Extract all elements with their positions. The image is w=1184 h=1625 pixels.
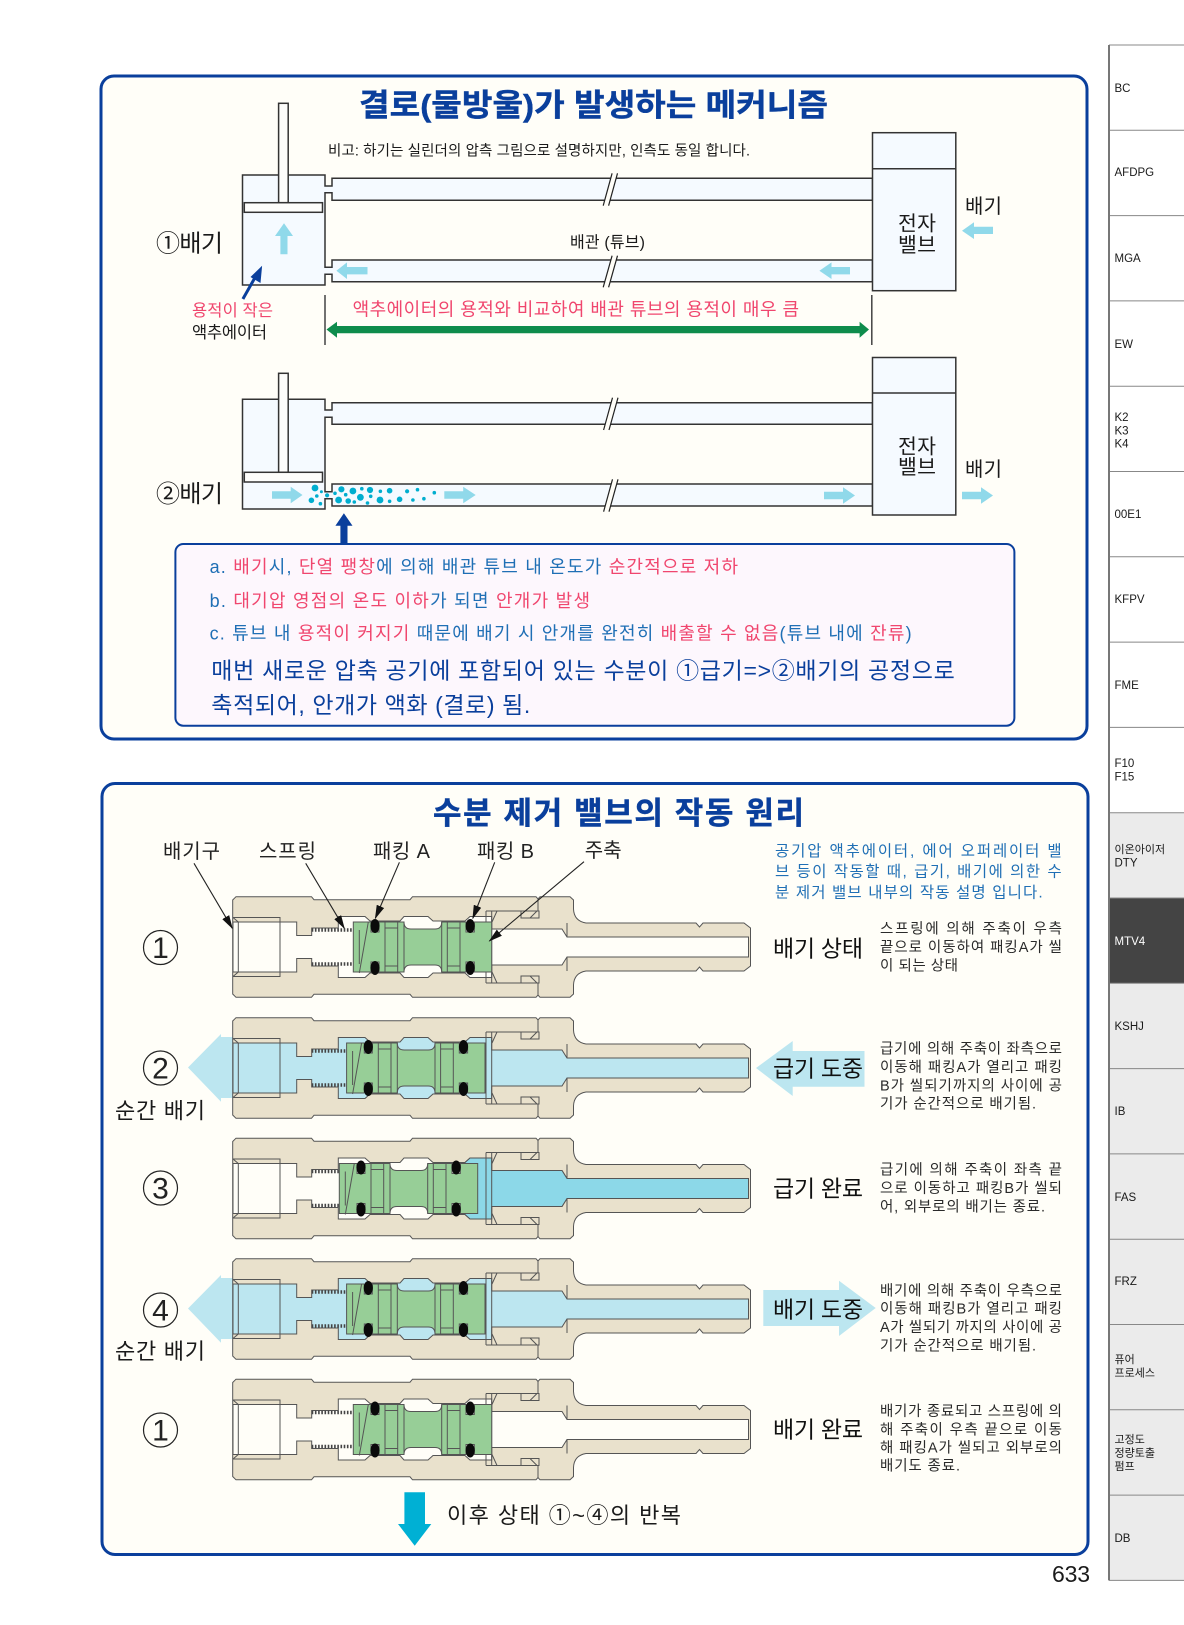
valve state 5: exhaust complete: [233, 1379, 750, 1480]
panel: condensation mechanism: [101, 76, 1087, 739]
intro text: [775, 842, 1062, 902]
condensation droplets: [309, 485, 436, 506]
panel: water removal valve: [102, 784, 1088, 1554]
valve state 2: supply in progress: [188, 1018, 750, 1118]
description 3: 으로 이동하고 패킹B가 씰되: [880, 1180, 1062, 1197]
label: instant exhaust 4: 순간 배기: [115, 1339, 205, 1364]
state label 4: 배기 도중: [773, 1296, 863, 1322]
state label 1: 배기 상태: [773, 936, 863, 962]
arrow: exhaust in progress: [763, 1281, 876, 1336]
intro text: 분 제거 밸브 내부의 작동 설명 입니다.: [775, 884, 1043, 902]
label: piping tube: 배관 (튜브): [570, 234, 645, 252]
sidebar tabs: EW: [1114, 339, 1133, 351]
diagram 1: exhaust start: [242, 103, 993, 299]
blowout arrow left 2: [188, 1034, 240, 1102]
sidebar tabs: 퓨어: [1114, 1353, 1135, 1366]
state label 2: 급기 도중: [773, 1056, 863, 1082]
label: actuator: 액추에이터: [192, 323, 267, 342]
step number 2: [144, 1051, 178, 1086]
valve state 1: exhaust state: [233, 897, 750, 997]
sidebar tabs: DTY: [1114, 858, 1138, 870]
step number 1: [144, 930, 178, 965]
sidebar tabs: 펌프: [1114, 1460, 1135, 1473]
item b: b. 대기압 영점의 온도 이하가 되면 안개가 발생: [210, 591, 590, 611]
arrow: repeat: [398, 1492, 431, 1546]
sidebar tabs: K2: [1114, 412, 1129, 424]
dimension arrow: tube length: [325, 295, 872, 345]
sidebar tabs: 프로세스: [1114, 1367, 1155, 1380]
label: exhaust valve side 2: 배기: [965, 458, 1002, 481]
step number 3: 3: [152, 1172, 169, 1206]
step number 1: 1: [152, 932, 169, 965]
conclusion line 2: 축적되어, 안개가 액화 (결로) 됨.: [211, 692, 530, 718]
part labels: 패킹 B: [477, 840, 534, 863]
arrow: up to info box: [335, 513, 352, 545]
valve state 3: supply complete: [233, 1138, 750, 1239]
part labels: [163, 839, 622, 863]
callout: volume comparison: 액추에이터의 용적와 비교하여 배관 튜브의 용적이 매우 큼: [353, 300, 799, 320]
page number: 633: [1052, 1561, 1090, 1587]
intro text: 공기압 액추에이터, 에어 오퍼레이터 밸: [775, 842, 1062, 860]
sidebar tabs: F10: [1114, 758, 1134, 770]
sidebar tabs: K4: [1114, 439, 1129, 451]
sidebar tabs: F15: [1114, 772, 1134, 784]
step number 1 repeat: [144, 1413, 178, 1448]
label: exhaust valve side 1: 배기: [965, 195, 1002, 218]
label: exhaust 2: ②배기: [156, 481, 223, 508]
step number 4: 4: [152, 1294, 169, 1328]
description 2: 이동해 패킹A가 열리고 패킹: [880, 1059, 1062, 1076]
description 4: 이동해 패킹B가 열리고 패킹: [880, 1300, 1062, 1317]
description 2: B가 씰되기까지의 사이에 공: [880, 1077, 1062, 1094]
label: exhaust 1: ①배기: [156, 230, 223, 258]
sidebar tabs: FME: [1114, 680, 1139, 692]
sidebar tabs: IB: [1114, 1106, 1126, 1118]
sidebar tabs: AFDPG: [1114, 167, 1154, 179]
item a: a. 배기시, 단열 팽창에 의해 배관 튜브 내 온도가 순간적으로 저하: [210, 557, 738, 577]
part labels: 배기구: [163, 840, 220, 863]
sidebar tabs: KSHJ: [1114, 1021, 1144, 1033]
sidebar tabs: DB: [1114, 1533, 1131, 1545]
description 2: [880, 1040, 1062, 1112]
sidebar tabs: MGA: [1114, 253, 1141, 265]
description 1: 이 되는 상태: [880, 957, 958, 974]
description 5: 해 패킹A가 씰되고 외부로의: [880, 1439, 1062, 1456]
sidebar tabs: 00E1: [1114, 509, 1141, 521]
part labels: 스프링: [259, 840, 316, 863]
state label 3: 급기 완료: [773, 1176, 863, 1202]
label: solenoid valve 1: 전자: [898, 212, 936, 236]
sidebar tabs: 이온아이저: [1114, 843, 1165, 856]
conclusion line 1: 매번 새로운 압축 공기에 포함되어 있는 수분이 ①급기=>②배기의 공정으로: [211, 658, 955, 684]
description 2: 기가 순간적으로 배기됨.: [880, 1095, 1036, 1112]
description 3: 급기에 의해 주축이 좌측 끝: [880, 1161, 1062, 1178]
sidebar tabs: FRZ: [1114, 1276, 1137, 1288]
sidebar tabs: FAS: [1114, 1192, 1137, 1204]
step number 2: 2: [152, 1052, 169, 1086]
valve state 4: exhaust in progress: [188, 1259, 750, 1359]
sidebar tabs: MTV4: [1114, 936, 1146, 948]
description 5: 해 주축이 우측 끝으로 이동: [880, 1421, 1062, 1438]
item c: c. 튜브 내 용적이 커지기 때문에 배기 시 안개를 완전히 배출할 수 없음(튜브 내에 잔류): [210, 624, 912, 644]
sidebar tabs: K3: [1114, 425, 1129, 437]
arrow: supply in progress: [756, 1041, 864, 1096]
description 4: A가 씰되기 까지의 사이에 공: [880, 1319, 1062, 1336]
description 3: [880, 1161, 1062, 1215]
description 4: 배기에 의해 주축이 우측으로: [880, 1282, 1062, 1299]
intro text: 브 등이 작동할 때, 급기, 배기에 의한 수: [775, 862, 1062, 880]
part labels: 주축: [585, 839, 622, 862]
description 1: [880, 920, 1062, 974]
info box: [175, 544, 1014, 726]
sidebar tabs: KFPV: [1114, 594, 1145, 606]
repeat text: 이후 상태 ①~④의 반복: [447, 1503, 681, 1528]
part labels: 패킹 A: [373, 840, 431, 863]
note text: 비고: 하기는 실린더의 압측 그림으로 설명하지만, 인측도 동일 합니다.: [328, 142, 750, 160]
description 1: 스프링에 의해 주축이 우측: [880, 920, 1062, 937]
description 5: 배기도 종료.: [880, 1457, 960, 1474]
state label 5: 배기 완료: [773, 1416, 863, 1442]
blowout arrow left 4: [188, 1275, 240, 1343]
sidebar tabs: [1109, 45, 1184, 1580]
description 5: 배기가 종료되고 스프링에 의: [880, 1403, 1062, 1420]
sidebar tabs: BC: [1114, 83, 1130, 95]
label: solenoid valve 1 line 2: 밸브: [898, 234, 936, 257]
description 4: [880, 1282, 1062, 1354]
label: solenoid valve 2: 전자: [898, 436, 936, 458]
description 2: 급기에 의해 주축이 좌측으로: [880, 1040, 1062, 1057]
heading: valve operation principle: 수분 제거 밸브의 작동 원리: [433, 796, 804, 831]
step number 3: [144, 1171, 178, 1206]
description 3: 어, 외부로의 배기는 종료.: [880, 1198, 1045, 1215]
description 1: 끝으로 이동하여 패킹A가 씰: [880, 939, 1062, 956]
leader lines: [194, 862, 584, 941]
diagram 2: exhaust with condensation: [242, 358, 993, 515]
label: solenoid valve 2 line 2: 밸브: [898, 456, 936, 479]
label: small-volume actuator: 용적이 작은: [192, 301, 273, 320]
sidebar tabs: 고정도: [1114, 1433, 1145, 1446]
sidebar tabs: 정량토출: [1114, 1447, 1155, 1460]
step number 1 repeat: 1: [152, 1414, 169, 1448]
description 4: 기가 순간적으로 배기됨.: [880, 1337, 1036, 1354]
description 5: [880, 1403, 1062, 1474]
step number 4: [144, 1293, 178, 1328]
heading: condensation mechanism: 결로(물방울)가 발생하는 메커니즘: [359, 88, 828, 123]
label: instant exhaust 2: 순간 배기: [115, 1098, 205, 1124]
